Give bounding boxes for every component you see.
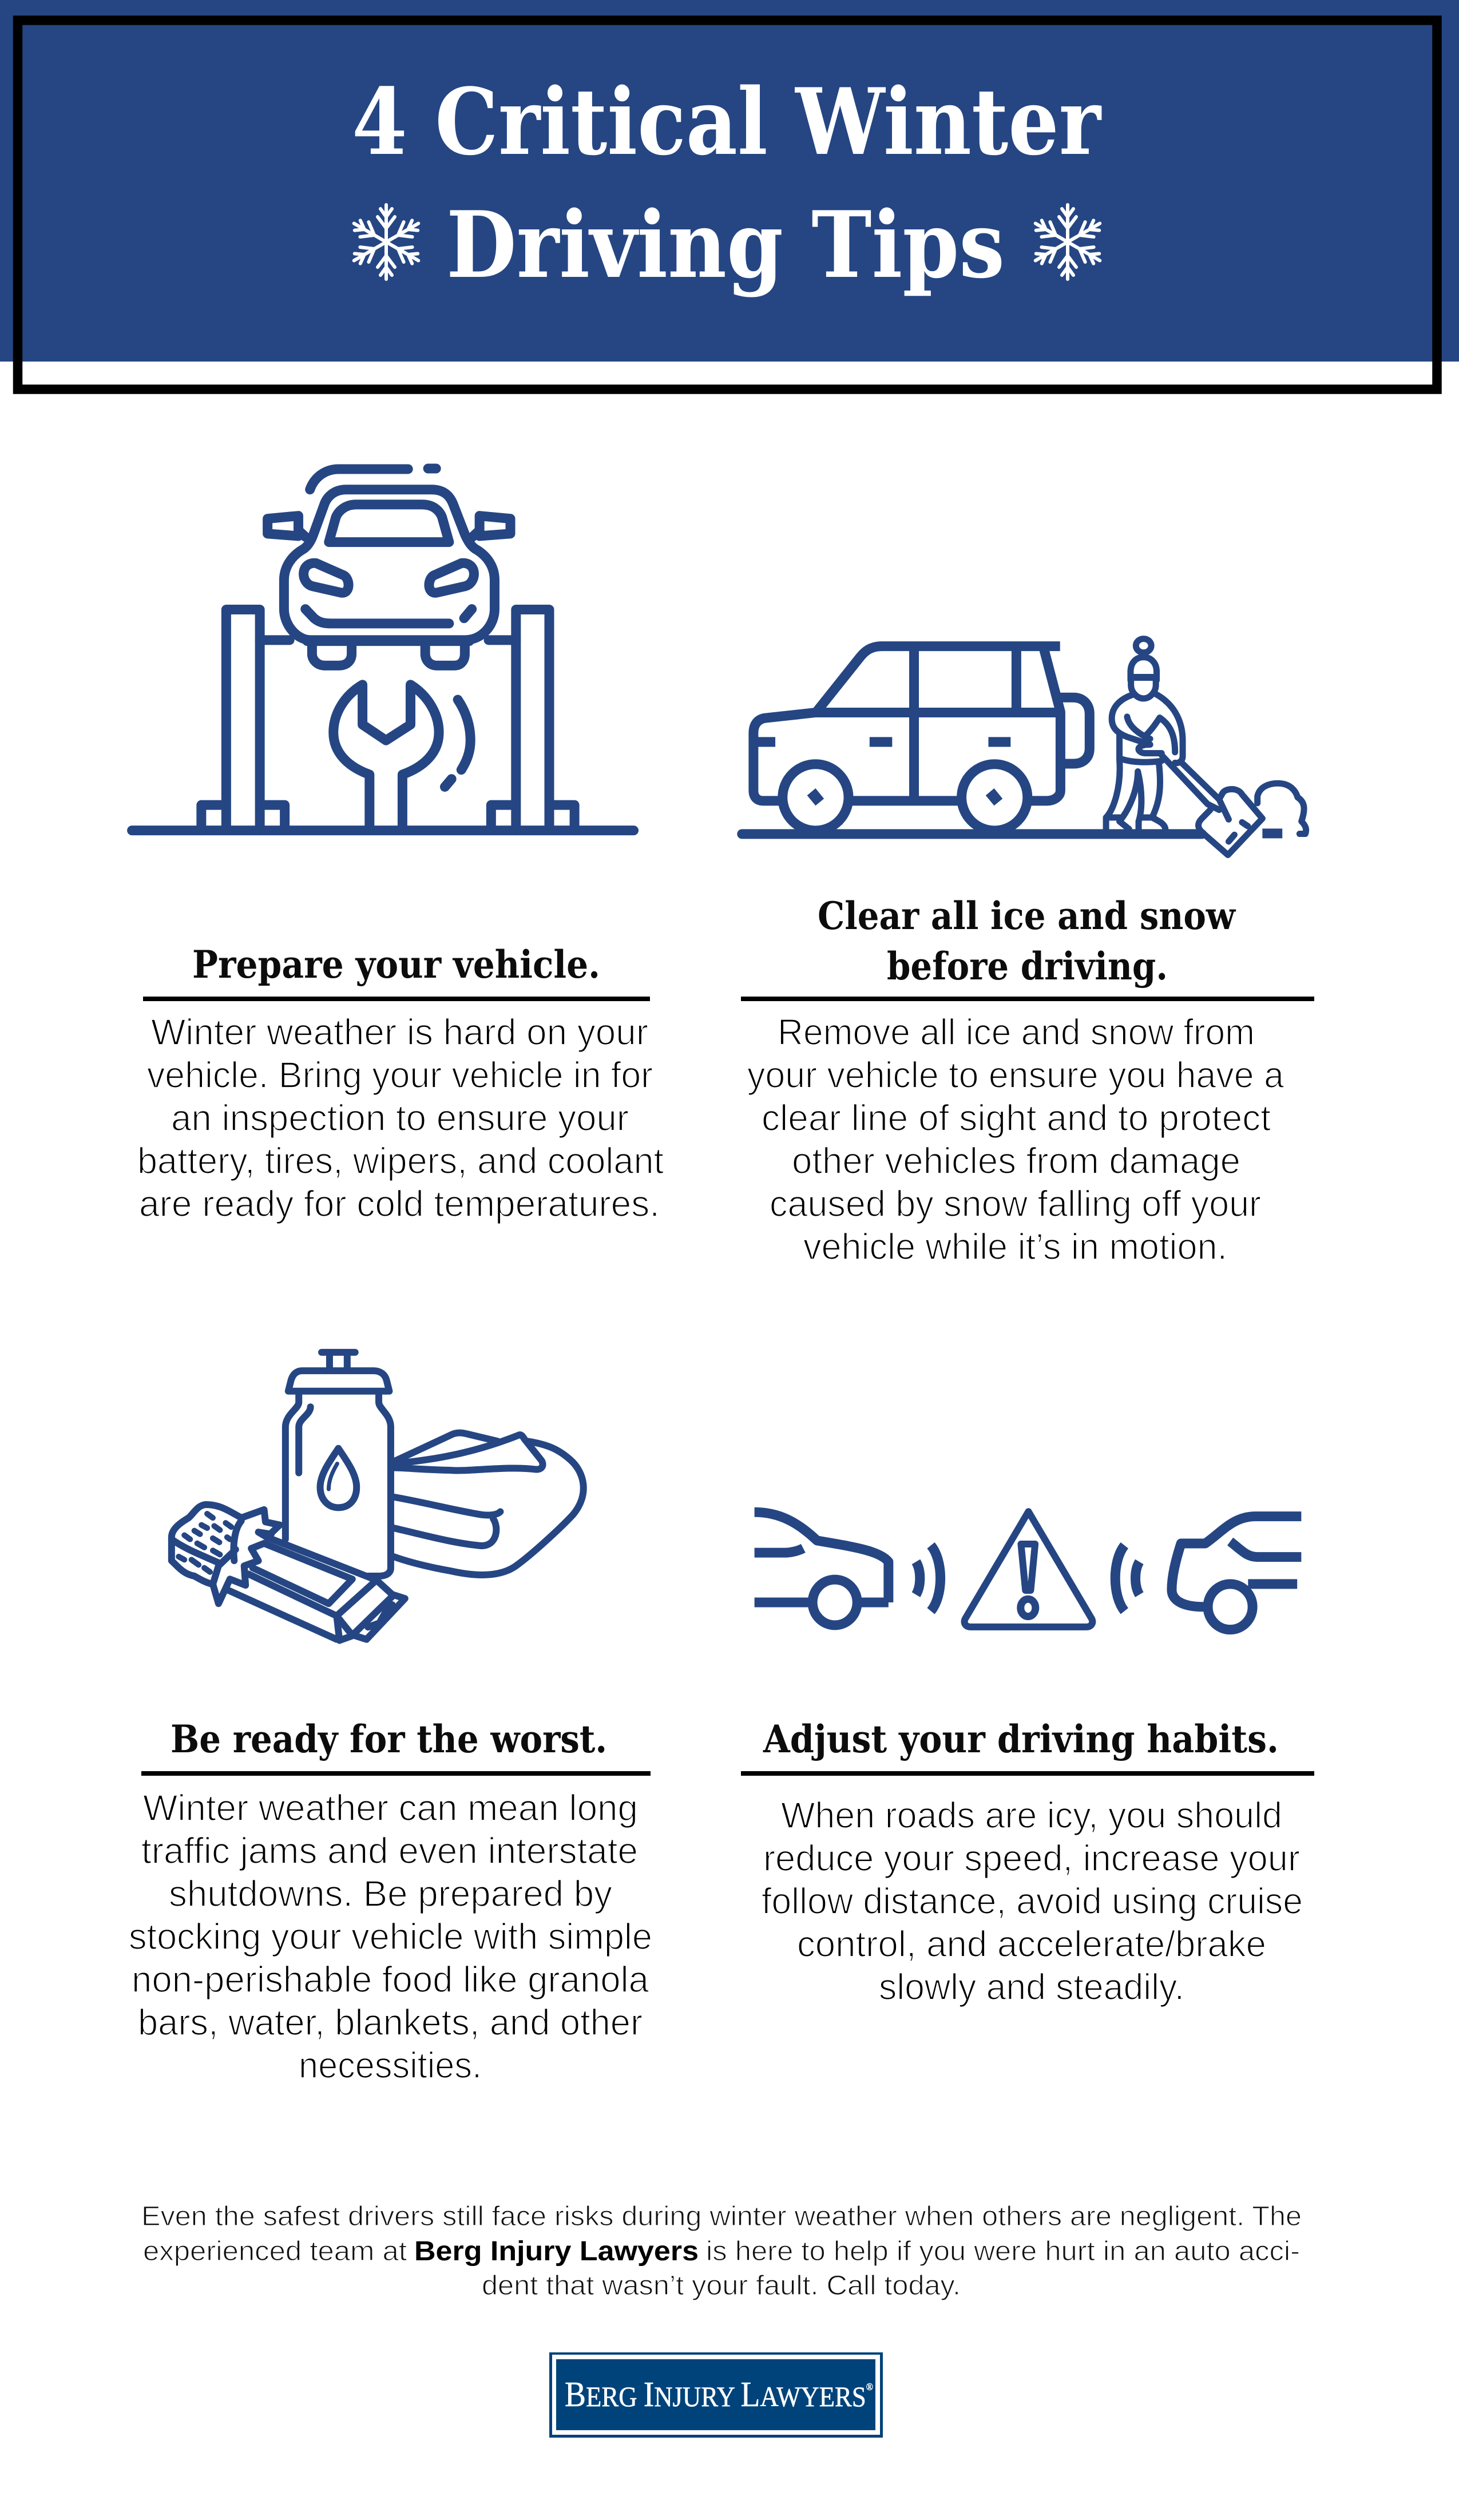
title line 2: Driving Tips: [446, 191, 1005, 299]
footer paragraph: Berg Injury Lawyers: [414, 2236, 699, 2267]
text block: prepare your vehicle: vehicle. Bring your vehicle in for: [147, 1054, 653, 1096]
footer paragraph: is here to help if you were hurt in an auto acci-: [706, 2236, 1300, 2267]
heading: prepare your vehicle: Prepare your vehicle.: [192, 942, 600, 987]
text block: be ready for the worst: stocking your vehicle with simple: [129, 1916, 652, 1957]
text block: clear ice and snow: [747, 1011, 1284, 1267]
text block: prepare your vehicle: Winter weather is hard on your: [151, 1011, 648, 1053]
text block: be ready for the worst: non-perishable food like granola: [132, 1959, 649, 2000]
text block: be ready for the worst: Winter weather can mean long: [143, 1787, 638, 1828]
icon: right snowflake: [1031, 205, 1104, 279]
icon: car on lift with wrench: [132, 469, 634, 831]
text block: adjust your driving habits: reduce your speed, increase your: [763, 1838, 1300, 1879]
text block: be ready for the worst: traffic jams and even interstate: [141, 1830, 638, 1871]
heading: clear all ice and snow: Clear all ice and snow: [818, 894, 1236, 938]
heading: adjust your driving habits: Adjust your driving habits.: [763, 1717, 1279, 1761]
title line 1: 4 Critical Winter: [352, 68, 1101, 176]
logo: Berg Injury Lawyers: ®: [866, 2381, 873, 2392]
text block: prepare your vehicle: are ready for cold temperatures.: [139, 1183, 660, 1224]
footer paragraph: Even the safest drivers still face risks during winter weather when others are negligent. The: [141, 2201, 1302, 2232]
text block: be ready for the worst: necessities.: [299, 2045, 482, 2086]
heading: clear all ice and snow: [818, 894, 1236, 989]
logo: Berg Injury Lawyers: [549, 2352, 883, 2438]
logo: Berg Injury Lawyers: BERG INJURY LAWYERS: [565, 2375, 878, 2414]
text block: clear ice and snow: vehicle while it’s in motion.: [803, 1226, 1227, 1267]
text block: adjust your driving habits: [762, 1795, 1303, 2007]
text block: be ready for the worst: bars, water, blankets, and other: [138, 2002, 643, 2043]
icon: left snowflake: [350, 205, 423, 279]
footer paragraph: [141, 2201, 1302, 2301]
text block: prepare your vehicle: [137, 1011, 664, 1224]
text block: adjust your driving habits: control, and accelerate/brake: [797, 1923, 1266, 1965]
panel: prepare your vehicle: [132, 469, 664, 1224]
text block: clear ice and snow: Remove all ice and snow from: [778, 1011, 1255, 1053]
footer paragraph: dent that wasn’t your fault. Call today.: [482, 2271, 961, 2301]
heading: clear all ice and snow: before driving.: [887, 944, 1168, 989]
icon: car and person shoveling snow: [742, 639, 1306, 855]
header banner: [0, 0, 1459, 389]
text block: prepare your vehicle: an inspection to ensure your: [171, 1097, 629, 1138]
text block: clear ice and snow: your vehicle to ensure you have a: [747, 1054, 1284, 1096]
header black frame: [18, 21, 1437, 389]
text block: clear ice and snow: other vehicles from damage: [792, 1140, 1240, 1181]
panel: adjust your driving habits: [741, 1511, 1314, 2007]
text block: adjust your driving habits: slowly and steadily.: [879, 1966, 1184, 2007]
text block: adjust your driving habits: When roads are icy, you should: [781, 1795, 1282, 1836]
text block: clear ice and snow: clear line of sight and to protect: [762, 1097, 1271, 1138]
icon: two cars with warning triangle: [755, 1511, 1301, 1630]
text block: adjust your driving habits: follow distance, avoid using cruise: [762, 1880, 1303, 1922]
heading: be ready for the worst: Be ready for the worst.: [171, 1717, 607, 1761]
text block: clear ice and snow: caused by snow falling off your: [770, 1183, 1261, 1224]
icon: water bottle, blanket and granola bar: [172, 1352, 584, 1640]
text block: be ready for the worst: shutdowns. Be prepared by: [169, 1873, 612, 1914]
text block: prepare your vehicle: battery, tires, wipers, and coolant: [137, 1140, 664, 1181]
footer paragraph: experienced team at: [143, 2236, 407, 2267]
panel: clear ice and snow: [741, 639, 1314, 1267]
panel: be ready for the worst: [129, 1352, 652, 2086]
text block: be ready for the worst: [129, 1787, 652, 2086]
